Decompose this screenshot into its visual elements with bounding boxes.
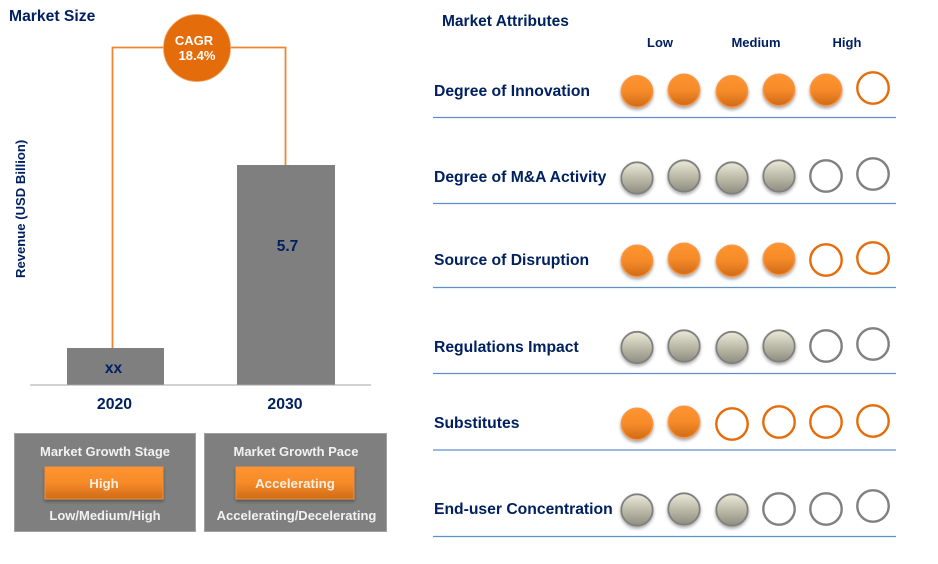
row: substitutes: Substitutes <box>434 415 520 432</box>
value: 2020: xx <box>105 360 122 377</box>
row: source of disruption <box>433 242 896 288</box>
badge: high: High <box>89 476 119 491</box>
row: end-user concentration: End-user Concentration <box>434 501 613 518</box>
bar chart: revenue <box>13 140 371 413</box>
callout: CAGR: 18.4% <box>179 48 216 63</box>
heading: market attributes: Market Attributes <box>442 13 569 30</box>
panel: market growth stage <box>14 434 196 532</box>
row: degree of innovation: Degree of Innovation <box>434 83 590 100</box>
bar: 2030 <box>237 165 335 385</box>
panel: market growth pace: Accelerating/Decelerating <box>217 508 376 523</box>
arrow: CAGR connector <box>112 48 286 348</box>
panel: market growth stage: Market Growth Stage <box>40 444 170 459</box>
scale labels: Low <box>647 35 674 50</box>
heading: market size: Market Size <box>9 8 96 25</box>
bar: 2020 <box>67 348 164 385</box>
row: regulations impact <box>433 328 896 374</box>
row: source of disruption: Source of Disruption <box>434 252 589 269</box>
year label: 2030: 2030 <box>267 396 303 413</box>
axis title: Revenue (USD Billion) <box>13 140 28 278</box>
badge: accelerating <box>236 467 354 499</box>
value: 2030: 5.7 <box>277 238 298 255</box>
callout: CAGR <box>164 14 230 82</box>
panel: market growth pace <box>204 434 386 532</box>
row: substitutes <box>433 405 896 450</box>
callout: CAGR: CAGR <box>175 33 214 48</box>
year label: 2020: 2020 <box>97 396 132 413</box>
scale labels: High <box>833 35 861 50</box>
scale labels <box>647 35 861 50</box>
row: end-user concentration <box>433 490 896 536</box>
row: degree of M&A activity <box>433 158 896 204</box>
panel: market growth stage: Low/Medium/High <box>49 508 161 523</box>
badge: high <box>45 467 163 499</box>
scale labels: Medium <box>731 35 781 50</box>
row: degree of innovation <box>433 72 896 118</box>
row: regulations impact: Regulations Impact <box>434 339 579 356</box>
badge: accelerating: Accelerating <box>255 476 335 491</box>
panel: market growth pace: Market Growth Pace <box>234 444 358 459</box>
row: degree of M&A activity: Degree of M&A Activity <box>434 169 607 186</box>
